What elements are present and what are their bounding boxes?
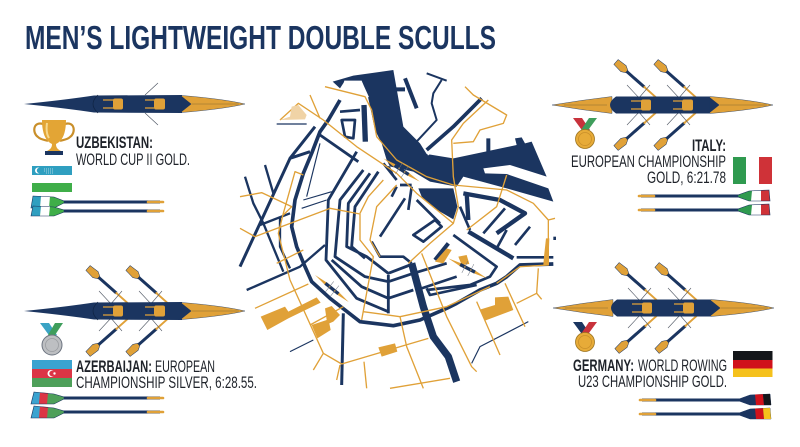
oars: Italy [639, 190, 770, 215]
text: Germany: WORLD ROWING [638, 356, 727, 375]
oars: Germany [640, 394, 771, 419]
text: Germany: U23 CHAMPIONSHIP GOLD. [578, 372, 727, 391]
oars: Uzbekistan [31, 196, 163, 216]
oars: Azerbaijan [31, 392, 163, 418]
flag: Italy [733, 157, 772, 184]
text: Italy: GOLD, 6:21.78 [647, 168, 726, 187]
boat: Italy [552, 59, 773, 151]
panel: Italy [552, 59, 773, 215]
icon: trophy [34, 120, 74, 155]
panel: Germany [553, 262, 774, 419]
orange parks [261, 238, 549, 357]
mini boats on map [380, 153, 423, 187]
icon: silver medal [40, 323, 63, 355]
text: Italy [571, 136, 726, 187]
map of Amsterdam canals [240, 70, 556, 388]
flag: Azerbaijan [32, 360, 72, 387]
text: Uzbekistan: UZBEKISTAN: [76, 133, 153, 152]
text: Azerbaijan: CHAMPIONSHIP SILVER, 6:28.55. [76, 373, 257, 392]
text: Azerbaijan: AZERBAIJAN: [76, 357, 152, 376]
title: MEN’S LIGHTWEIGHT DOUBLE SCULLS [25, 19, 496, 56]
text: Azerbaijan: EUROPEAN [155, 357, 215, 376]
panel: Azerbaijan [24, 265, 257, 418]
text: Germany [573, 356, 727, 391]
pale park [280, 105, 307, 120]
white channels [340, 81, 440, 155]
text: Italy: EUROPEAN CHAMPIONSHIP [571, 152, 726, 171]
panel: Uzbekistan [24, 83, 245, 216]
harbour water [333, 70, 553, 202]
flag: Germany [733, 351, 772, 377]
text: Azerbaijan [76, 357, 257, 392]
text: Uzbekistan [76, 133, 190, 169]
flag: Uzbekistan [32, 166, 72, 192]
boat: Uzbekistan [24, 83, 245, 125]
icon: gold medal [573, 118, 597, 148]
text: Uzbekistan: WORLD CUP II GOLD. [76, 150, 190, 169]
boat: Germany [553, 262, 774, 354]
text: Italy: ITALY: [692, 136, 726, 155]
orange streets [240, 87, 555, 388]
icon: gold medal [573, 322, 597, 352]
navy canals [240, 73, 556, 385]
boat: Azerbaijan [24, 265, 245, 357]
text: Germany: GERMANY: [573, 356, 634, 375]
central harbour basin [418, 188, 457, 219]
